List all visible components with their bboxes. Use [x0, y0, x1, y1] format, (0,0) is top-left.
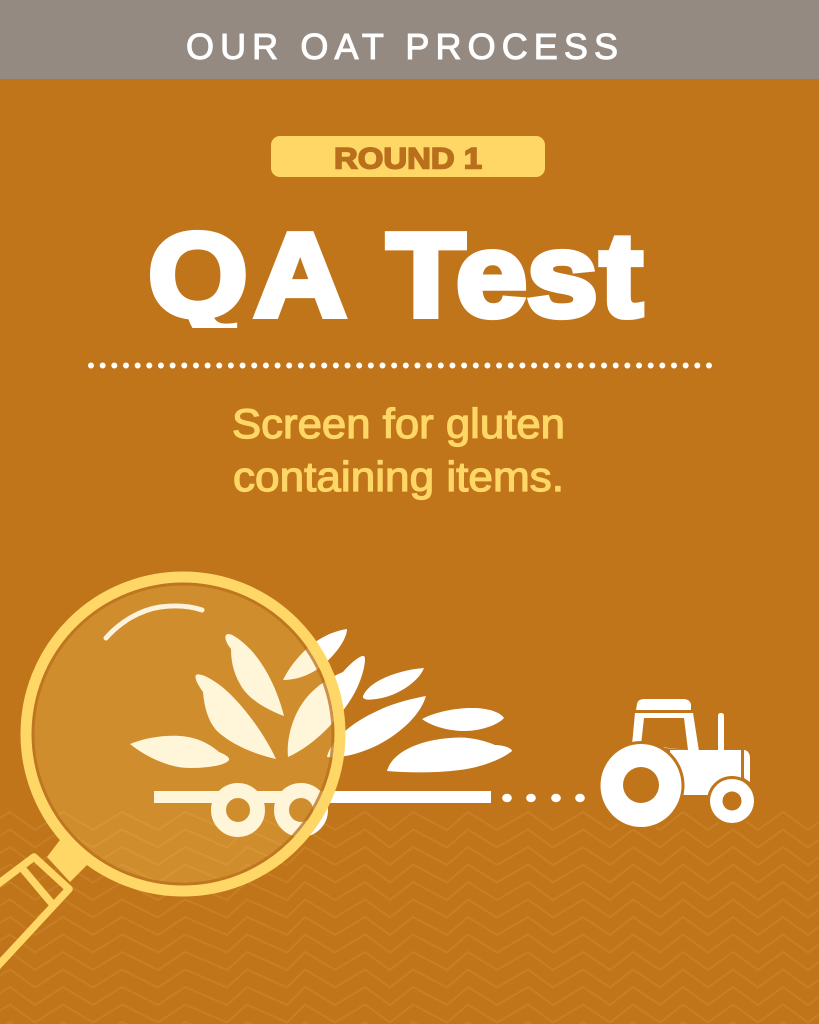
lens: [31, 582, 335, 886]
oat grains: [130, 629, 512, 772]
main title: QA Test: [148, 209, 643, 342]
header title: OUR OAT PROCESS: [186, 26, 618, 67]
icon: magnifying glass: [0, 577, 340, 970]
round badge: [271, 136, 545, 177]
subtitle: Screen for gluten: [232, 400, 565, 447]
handle: [0, 857, 69, 970]
neck: [47, 840, 87, 882]
glare: [106, 606, 202, 638]
lens inner edge: [33, 584, 333, 884]
icon: tractor: [600, 699, 754, 827]
trailer: [154, 790, 491, 830]
subtitle: containing items.: [233, 453, 564, 500]
hitch dots: [502, 794, 585, 802]
chevron ground pattern: [0, 812, 819, 1024]
header band: [0, 0, 819, 79]
lens rim: [26, 577, 340, 891]
badge label: ROUND 1: [334, 142, 482, 176]
subtitle: [232, 400, 565, 500]
dotted divider: [91, 362, 710, 368]
